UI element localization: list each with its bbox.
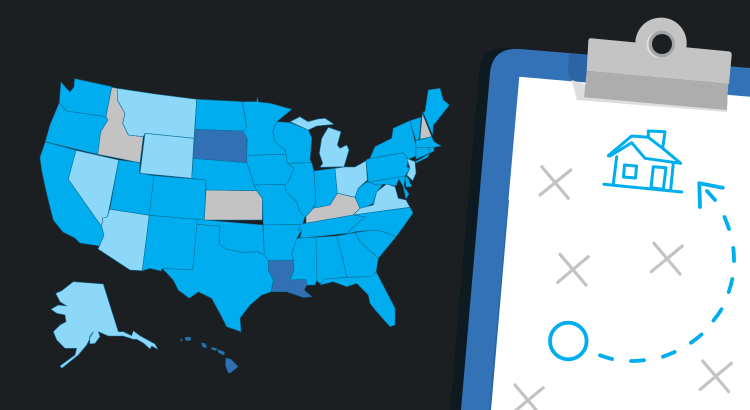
clip — [584, 18, 732, 110]
state: Colorado — [149, 176, 206, 220]
clipboard board — [461, 49, 750, 410]
paper edge shading — [489, 200, 509, 410]
state: Minnesota — [243, 97, 292, 155]
state: Wyoming — [140, 133, 194, 178]
clip hole — [652, 34, 672, 54]
state: Virginia — [353, 184, 410, 215]
clip top loop — [635, 18, 687, 69]
state: Arizona — [98, 209, 149, 271]
state: Connecticut — [416, 147, 430, 159]
clip shadow on board — [568, 54, 592, 83]
state: Arkansas — [263, 224, 302, 261]
state: Wisconsin — [273, 122, 312, 163]
state: West Virginia — [355, 182, 385, 208]
state: Delaware — [405, 176, 412, 187]
state: Ohio — [335, 161, 367, 197]
state: New Jersey — [407, 158, 416, 181]
clip ring — [648, 30, 675, 58]
state: Nebraska — [192, 158, 257, 191]
state: Missouri — [254, 184, 305, 229]
clipboard — [450, 18, 750, 410]
state: Alabama — [316, 236, 347, 283]
state: Michigan — [290, 117, 349, 167]
state: Rhode Island — [428, 147, 434, 153]
state: Alaska — [51, 282, 158, 368]
X mark 2 — [558, 254, 588, 285]
state: Florida — [320, 272, 395, 327]
state: New Mexico — [142, 215, 198, 271]
state: Kentucky — [306, 193, 360, 223]
state: Georgia — [337, 233, 378, 277]
state: Kansas — [204, 190, 262, 220]
X mark 5 — [512, 385, 543, 410]
clip shadow on paper — [572, 80, 728, 112]
clip body — [587, 38, 732, 84]
state: Pennsylvania — [366, 153, 410, 182]
clip ring highlight — [646, 32, 662, 58]
state: South Carolina — [355, 230, 396, 258]
state: Idaho — [98, 87, 143, 163]
state: Vermont — [410, 117, 421, 141]
X marks — [512, 167, 731, 410]
state: Oregon — [45, 103, 108, 154]
state: North Carolina — [347, 207, 413, 237]
choropleth map of the United States — [40, 79, 449, 373]
state: Nevada — [68, 150, 119, 227]
state: Maryland — [367, 176, 409, 199]
clip lower band — [584, 71, 728, 110]
state: Texas — [162, 224, 273, 332]
state: North Dakota — [195, 99, 247, 131]
state: South Dakota — [193, 129, 247, 163]
icon: house — [604, 131, 682, 192]
state: Montana — [117, 88, 197, 138]
X mark 1 — [540, 167, 571, 198]
state: Tennessee — [298, 215, 365, 238]
state: Mississippi — [290, 237, 317, 285]
clipboard shadow — [450, 48, 560, 410]
paper — [490, 77, 750, 410]
state: New York — [370, 121, 416, 159]
state: California — [40, 142, 104, 246]
dashed arrow — [600, 183, 734, 361]
start circle — [550, 323, 587, 359]
X mark 3 — [651, 243, 682, 274]
state: Maine — [423, 88, 449, 135]
state: Oklahoma — [197, 220, 264, 255]
Long Island — [415, 154, 429, 163]
state: Utah — [110, 160, 154, 215]
state: Indiana — [313, 168, 337, 208]
state: New Hampshire — [420, 113, 432, 139]
state: Washington — [59, 79, 112, 117]
state: Massachusetts — [416, 137, 441, 147]
state: Hawaii — [180, 337, 238, 373]
X mark 4 — [700, 361, 731, 392]
state: Louisiana — [268, 260, 312, 297]
state: Illinois — [285, 163, 316, 217]
state: Iowa — [247, 154, 294, 185]
